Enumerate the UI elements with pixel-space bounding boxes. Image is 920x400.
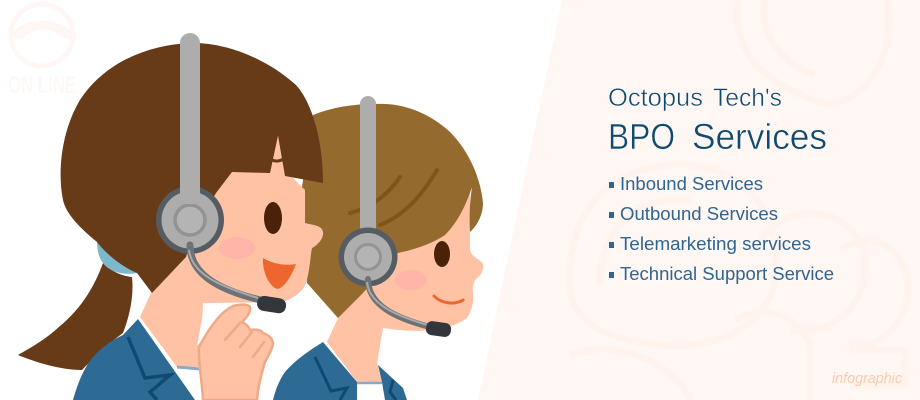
title word: Services: Services	[692, 116, 827, 157]
illustration: first agent	[18, 33, 323, 400]
list item: Telemarketing services	[620, 233, 811, 254]
caption: infographic: infographic	[832, 370, 902, 387]
face: eye, cheek, mouth	[219, 202, 296, 289]
hand	[199, 305, 273, 400]
shirt	[197, 303, 232, 346]
watermark: online logo: ON LINE	[8, 72, 76, 99]
hair tie	[97, 242, 137, 274]
forelock and eyebrow	[270, 136, 285, 178]
title word: Tech's: Tech's	[713, 84, 782, 112]
title	[608, 84, 827, 157]
title word: BPO: BPO	[608, 116, 675, 157]
neck and face	[327, 187, 483, 382]
headset	[156, 33, 287, 314]
service list	[609, 173, 834, 284]
ponytail	[18, 263, 133, 370]
title word: Octopus: Octopus	[608, 84, 703, 112]
watermark: headset agents in panel	[570, 0, 908, 400]
jacket	[73, 319, 200, 400]
hair	[61, 43, 323, 293]
headset	[338, 96, 452, 338]
hair	[300, 104, 483, 318]
watermark: online logo	[8, 4, 76, 99]
face: eye, cheek, smile	[395, 241, 463, 303]
panel: tinted background	[478, 0, 920, 400]
illustration: second agent	[273, 96, 483, 400]
bullets	[609, 182, 614, 278]
neck and face	[140, 136, 323, 367]
list item: Technical Support Service	[620, 263, 834, 284]
hair strands	[350, 170, 437, 225]
jacket	[273, 342, 407, 400]
list item: Outbound Services	[620, 203, 778, 224]
list item: Inbound Services	[620, 173, 763, 194]
